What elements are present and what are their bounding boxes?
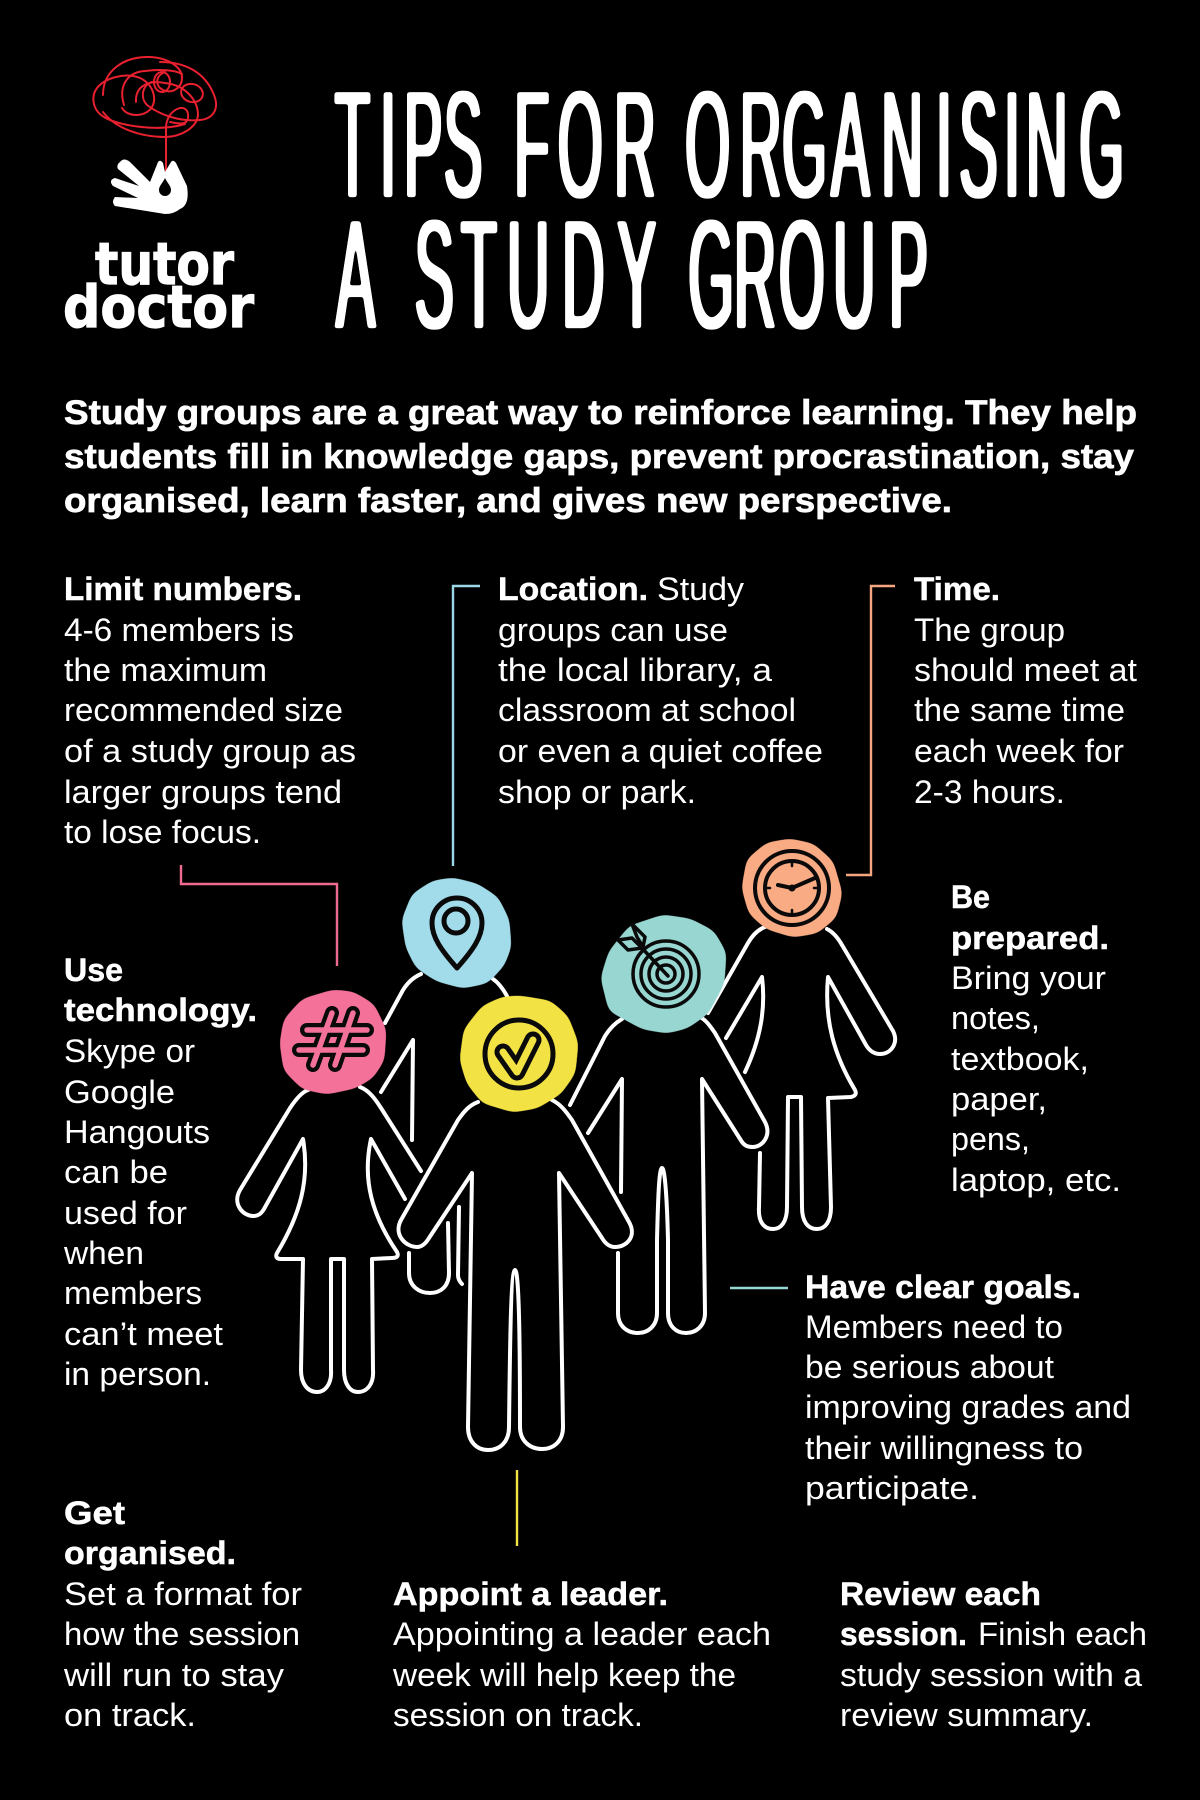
text block: location: the local library, a [498, 652, 772, 688]
head: blue blob [403, 879, 510, 987]
logo wordmark: doctor [63, 273, 254, 341]
person: pink head, technology [237, 991, 421, 1392]
text block: get organised [63, 1495, 302, 1733]
text block: limit numbers [64, 571, 356, 850]
text block: use technology: in person. [64, 1356, 211, 1392]
text block: get organised: how the session [64, 1616, 300, 1652]
person: teal head, goals [570, 916, 767, 1333]
text block: use technology: used for [64, 1195, 187, 1231]
icon: hashtag [299, 1013, 367, 1065]
head: pink blob [281, 991, 385, 1093]
text block: limit numbers: recommended size [64, 692, 343, 728]
text block: appoint a leader: week will help keep the [392, 1657, 736, 1693]
text block: review each session: session. [840, 1616, 967, 1652]
text block: time: 2-3 hours. [914, 774, 1065, 810]
connector: pink line to use technology [181, 865, 337, 966]
text block: appoint a leader [392, 1576, 771, 1733]
text block: time: the same time [914, 692, 1125, 728]
text block: use technology: Use [64, 952, 123, 988]
intro paragraph [64, 394, 1137, 520]
text block: have clear goals: Have clear goals. [805, 1269, 1081, 1305]
icon: clock [755, 851, 829, 925]
text block: location: Location. [498, 571, 648, 607]
head: yellow blob [461, 997, 577, 1111]
text block: be prepared: prepared. [951, 920, 1109, 956]
logo: tutor doctor [63, 57, 254, 341]
text block: review each session [840, 1576, 1147, 1733]
text block: be prepared: pens, [951, 1121, 1030, 1157]
intro paragraph: organised, learn faster, and gives new perspective. [64, 482, 952, 520]
intro paragraph: students fill in knowledge gaps, prevent procrastination, stay [64, 438, 1134, 476]
head: orange blob [743, 840, 841, 936]
logo wordmark: tutor [95, 230, 234, 298]
text block: have clear goals: participate. [805, 1470, 979, 1506]
text block: time: each week for [914, 733, 1124, 769]
text block: have clear goals [805, 1269, 1131, 1506]
text block: be prepared: textbook, [951, 1041, 1089, 1077]
text block: be prepared [951, 879, 1121, 1198]
text block: appoint a leader: Appointing a leader each [393, 1616, 771, 1652]
text block: time: should meet at [914, 652, 1137, 688]
text block: get organised: will run to stay [63, 1657, 284, 1693]
connector: teal line to clear goals [730, 1287, 788, 1289]
text block: limit numbers: 4-6 members is [64, 612, 294, 648]
intro paragraph: Study groups are a great way to reinforce learning. They help [64, 394, 1137, 432]
title: A STUDY GROUP [336, 188, 928, 361]
text block: have clear goals: improving grades and [805, 1389, 1131, 1425]
text block: limit numbers: of a study group as [64, 733, 356, 769]
text block: location: shop or park. [498, 774, 696, 810]
logo wordmark [63, 230, 254, 341]
icon: red scribble brain [93, 57, 216, 172]
icon: check in circle [485, 1020, 553, 1088]
text block: have clear goals: Members need to [805, 1309, 1063, 1345]
text block: limit numbers: to lose focus. [64, 814, 261, 850]
text block: time [914, 571, 1137, 810]
text block: time: Time. [914, 571, 1000, 607]
text block: limit numbers: Limit numbers. [64, 571, 302, 607]
text block: be prepared: notes, [951, 1000, 1040, 1036]
text block: limit numbers: larger groups tend [64, 774, 342, 810]
text block: use technology: members [64, 1275, 202, 1311]
text block: be prepared: Be [951, 879, 990, 915]
icon: target with arrow [618, 924, 699, 1007]
icon: map pin [432, 898, 482, 968]
text block: time: The group [914, 612, 1065, 648]
text block: location: or even a quiet coffee [498, 733, 823, 769]
text block: use technology: technology. [64, 992, 257, 1028]
text block: appoint a leader: session on track. [393, 1697, 643, 1733]
text block: be prepared: paper, [951, 1081, 1047, 1117]
text block: use technology: when [63, 1235, 144, 1271]
person: yellow head, leader [399, 997, 632, 1450]
connector: blue line to location [453, 586, 480, 866]
title [335, 61, 1124, 361]
text block: appoint a leader: Appoint a leader. [393, 1576, 668, 1612]
text block: use technology: can be [64, 1154, 168, 1190]
text block: get organised: organised. [64, 1535, 236, 1571]
text block: limit numbers: the maximum [64, 652, 267, 688]
text block: location: Study [657, 571, 744, 607]
person: orange head, time [708, 840, 895, 1229]
text block: location [498, 571, 823, 810]
text block: have clear goals: their willingness to [805, 1430, 1083, 1466]
person: blue head, location [381, 879, 510, 1293]
text block: location: classroom at school [498, 692, 796, 728]
text block: be prepared: laptop, etc. [951, 1162, 1121, 1198]
text block: be prepared: Bring your [951, 960, 1106, 996]
text block: review each session: Finish each [978, 1616, 1147, 1652]
text block: review each session: review summary. [840, 1697, 1093, 1733]
text block: use technology: Google [64, 1074, 175, 1110]
text block: use technology: Skype or [64, 1033, 195, 1069]
text block: get organised: Set a format for [64, 1576, 302, 1612]
connector: orange line to time [846, 586, 895, 875]
text block: use technology [63, 952, 257, 1392]
text block: use technology: Hangouts [64, 1114, 210, 1150]
text block: use technology: can’t meet [64, 1316, 223, 1352]
icon: white hand [111, 160, 188, 214]
text block: review each session: study session with a [840, 1657, 1142, 1693]
head: teal blob [602, 916, 725, 1032]
text block: have clear goals: be serious about [805, 1349, 1054, 1385]
text block: get organised: Get [64, 1495, 125, 1531]
connector: yellow line to appoint a leader [516, 1470, 518, 1546]
figure group: five people [237, 840, 895, 1450]
text block: review each session: Review each [840, 1576, 1041, 1612]
text block: get organised: on track. [64, 1697, 196, 1733]
title: TIPS FOR ORGANISING [335, 61, 1124, 230]
text block: location: groups can use [498, 612, 728, 648]
